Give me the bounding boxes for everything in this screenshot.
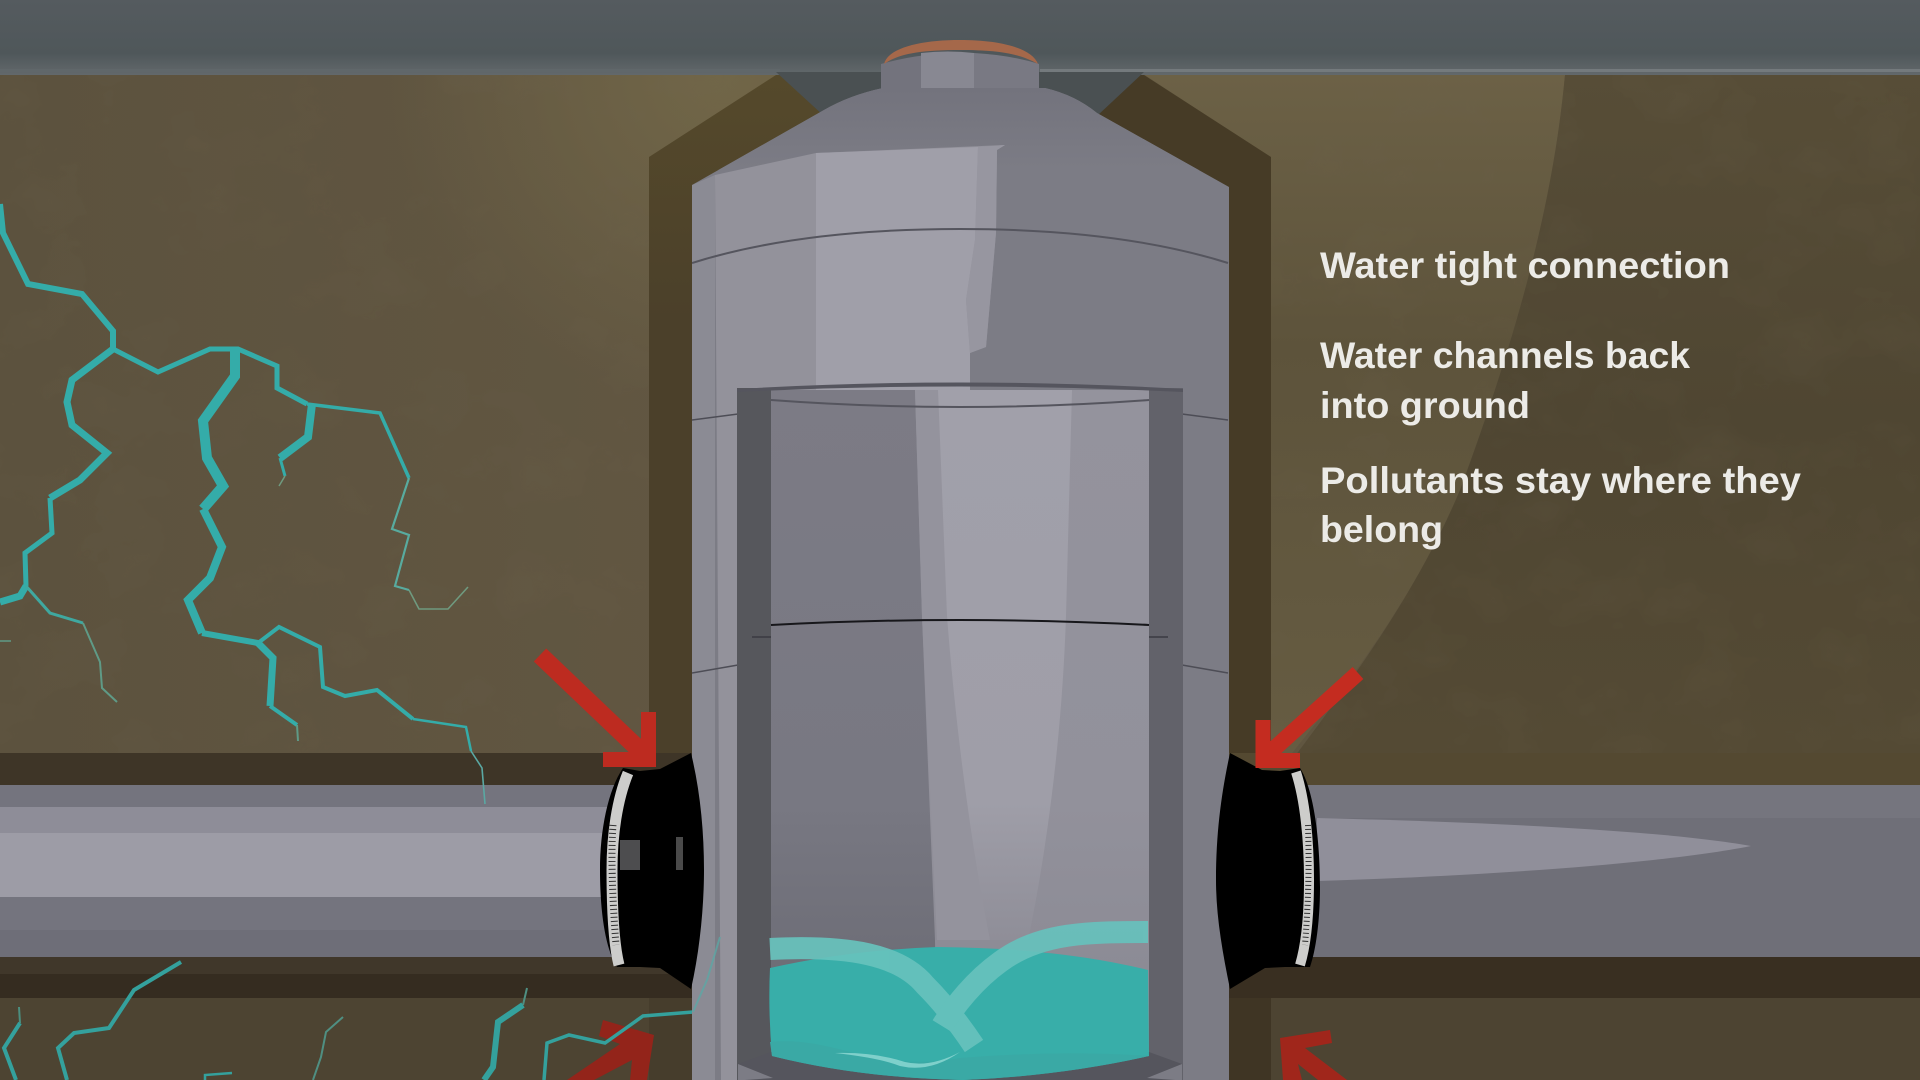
pipe trench bands bbox=[0, 753, 1920, 1080]
interior seam line bbox=[771, 620, 1149, 625]
road surface band bbox=[0, 0, 1920, 76]
lower right red arrow bbox=[1280, 1030, 1347, 1080]
floor bbox=[738, 1052, 1182, 1080]
concrete backfill around basin bbox=[649, 75, 1271, 1080]
text: pollutants stay where they belong: Pollutants stay where they bbox=[1320, 459, 1801, 501]
water seepage cracks in soil: lower left bbox=[4, 962, 693, 1080]
left rubber gasket with steel clamp bbox=[600, 753, 704, 989]
water pool in basin bbox=[769, 947, 1149, 1080]
text: water channels back into ground bbox=[1320, 334, 1690, 426]
text: water tight connection: Water tight connection bbox=[1320, 244, 1730, 286]
upper left red arrow bbox=[540, 655, 648, 760]
lower left red arrow bbox=[567, 1020, 654, 1080]
faint crack on basin wall bbox=[693, 937, 720, 1012]
right rubber gasket with steel clamp bbox=[1216, 753, 1320, 989]
orange lid rim bbox=[884, 40, 1038, 64]
top rim bbox=[737, 382, 1183, 392]
precast basin body bbox=[692, 80, 1229, 1080]
upper right red arrow bbox=[1263, 673, 1358, 760]
text: pollutants stay where they belong bbox=[1320, 459, 1801, 550]
grey reflection marks bbox=[620, 840, 640, 870]
basin neck and lid bbox=[881, 40, 1039, 96]
basin interior bbox=[737, 382, 1183, 1080]
text: water channels back into ground: Water channels back bbox=[1320, 334, 1690, 376]
text: water channels back into ground: into ground bbox=[1320, 384, 1530, 426]
steel band clamp bbox=[1296, 772, 1309, 965]
left inlet pipe bbox=[0, 785, 640, 957]
text: pollutants stay where they belong: belong bbox=[1320, 508, 1443, 550]
seam lines bbox=[692, 229, 1228, 263]
shadow under road behind neck bbox=[776, 72, 1144, 116]
water streams falling into pool bbox=[770, 932, 1148, 1046]
water seepage cracks in soil: upper left bbox=[0, 204, 485, 804]
steel band clamp bbox=[612, 773, 628, 965]
right outlet pipe bbox=[1290, 785, 1920, 957]
